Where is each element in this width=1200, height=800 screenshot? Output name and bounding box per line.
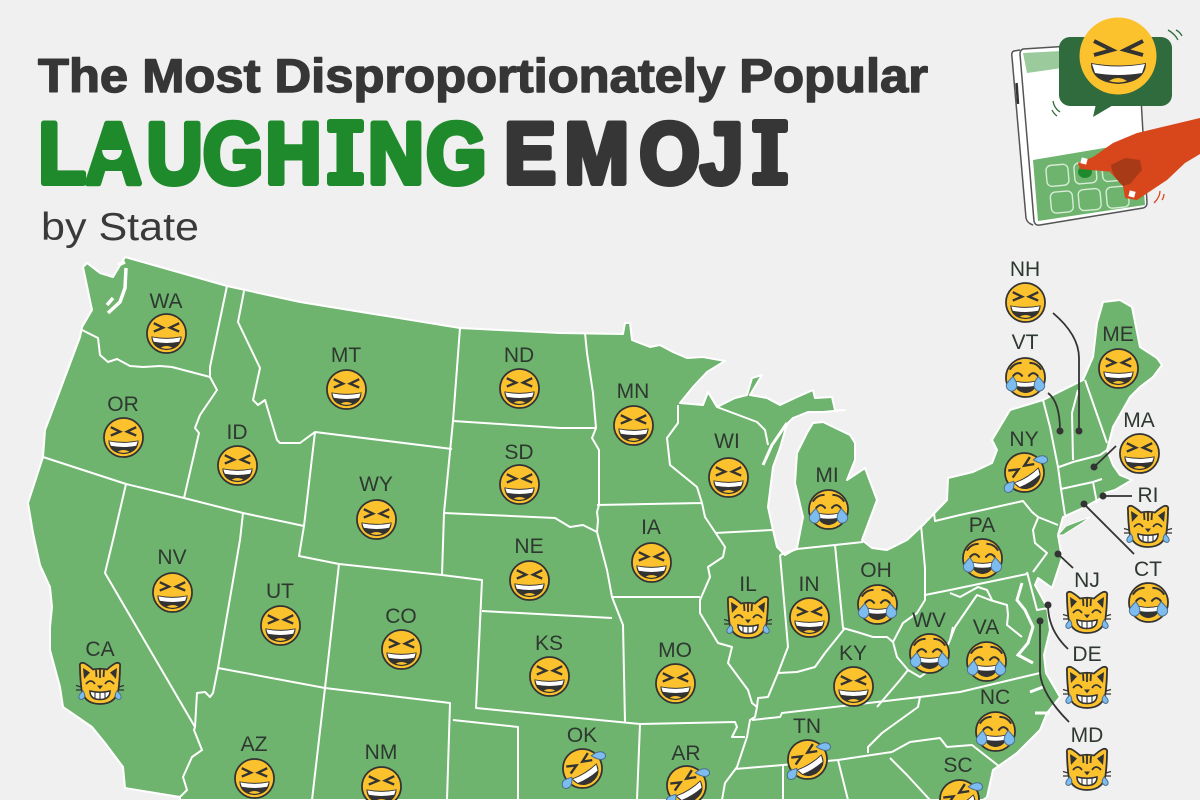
title: LAUGHING: LAUGHING [38, 106, 486, 202]
state: VT [1006, 331, 1045, 397]
state: OR [104, 393, 143, 457]
state: VT: VT [1012, 331, 1039, 354]
state: DE: DE [1072, 643, 1102, 666]
state: RI: RI [1138, 484, 1158, 507]
state: MT [327, 344, 366, 409]
state: WY: WY [359, 473, 393, 496]
state: WV: WV [912, 609, 946, 632]
state: KY: KY [839, 642, 867, 665]
state: CT [1129, 558, 1168, 622]
state: KS [530, 632, 569, 696]
subtitle: by State [41, 206, 199, 249]
state: OK [562, 724, 606, 790]
state: NH [1006, 258, 1045, 322]
state: WI: WI [714, 430, 740, 453]
state: AR: AR [671, 742, 701, 765]
state: TN [787, 715, 831, 781]
state: OR: OR [107, 393, 139, 416]
state: IL: IL [739, 573, 757, 596]
state: KS: KS [535, 632, 563, 655]
state: VA: VA [973, 616, 999, 639]
state: NY [1004, 428, 1048, 494]
state: MI: MI [815, 464, 839, 487]
state: MT: MT [331, 344, 361, 367]
state: IN: IN [798, 573, 820, 596]
state: NE [510, 535, 549, 600]
state: NJ: NJ [1074, 569, 1100, 592]
title: line one: The Most Disproportionately Popular [38, 49, 928, 102]
state: WV [910, 609, 949, 673]
state: OH [858, 559, 897, 624]
title: EMOJI: EMOJI [504, 106, 780, 202]
state: ID [218, 421, 257, 485]
state: CO [382, 605, 421, 669]
state: IA [632, 516, 671, 582]
leader line: CT [1080, 500, 1134, 554]
state: NV [153, 546, 192, 612]
state: MA: MA [1123, 409, 1155, 432]
state: UT [261, 580, 300, 645]
state: MD [1063, 724, 1111, 790]
state: AZ: AZ [241, 733, 268, 756]
state: IL [724, 573, 772, 638]
state: DE [1063, 643, 1111, 708]
state: MO [656, 639, 695, 703]
leader line: MD [1036, 618, 1069, 722]
state: IN [790, 573, 829, 637]
state: MO: MO [658, 639, 692, 662]
state: WA [147, 290, 186, 353]
state: IA: IA [641, 516, 661, 539]
state: MD: MD [1071, 724, 1103, 747]
leader line: DE [1044, 602, 1068, 649]
state: SD: SD [504, 441, 534, 464]
state: NH: NH [1010, 258, 1040, 281]
state: MN [614, 380, 653, 445]
state: MN: MN [617, 380, 649, 403]
map: contiguous United States [28, 257, 1162, 800]
state: RI [1124, 484, 1172, 547]
state: SC [939, 754, 983, 800]
state: SC: SC [943, 754, 973, 777]
state: OH: OH [860, 559, 892, 582]
state: CA [76, 638, 124, 704]
state: ID: ID [226, 421, 248, 444]
state: CT: CT [1134, 558, 1162, 581]
leader line: NJ [1054, 550, 1073, 568]
state: OK: OK [567, 724, 597, 747]
leader line: VT [1048, 393, 1064, 434]
state: CO: CO [385, 605, 417, 628]
state: NC [976, 686, 1015, 751]
state: NJ [1063, 569, 1111, 633]
illustration: phone with emoji bubble and pointing hand [1012, 18, 1200, 225]
state: KY [834, 642, 873, 706]
state: WI [709, 430, 748, 497]
leader line: MA [1090, 446, 1116, 470]
state: ND: ND [504, 344, 534, 367]
state: NV: NV [157, 546, 187, 569]
state: VA [967, 616, 1006, 681]
state: WA: WA [149, 290, 183, 313]
state: CA: CA [85, 638, 115, 661]
state: MA [1120, 409, 1159, 473]
state: NC: NC [980, 686, 1010, 709]
state: NM: NM [365, 741, 397, 764]
state: NE: NE [514, 535, 544, 558]
state: AR [666, 742, 710, 800]
state: AZ [235, 733, 274, 798]
state: PA [963, 514, 1002, 578]
state: ME: ME [1102, 323, 1134, 346]
state: MI [809, 464, 848, 529]
state: NY: NY [1009, 428, 1039, 451]
state: PA: PA [969, 514, 995, 537]
state: TN: TN [793, 715, 821, 738]
state: NM [362, 741, 401, 800]
leader line: NH [1053, 313, 1082, 434]
state: SD [500, 441, 539, 504]
leader line: RI [1100, 492, 1132, 500]
state: WY [357, 473, 396, 539]
state: ME [1099, 323, 1138, 388]
state: UT: UT [266, 580, 294, 603]
state: ND [500, 344, 539, 408]
